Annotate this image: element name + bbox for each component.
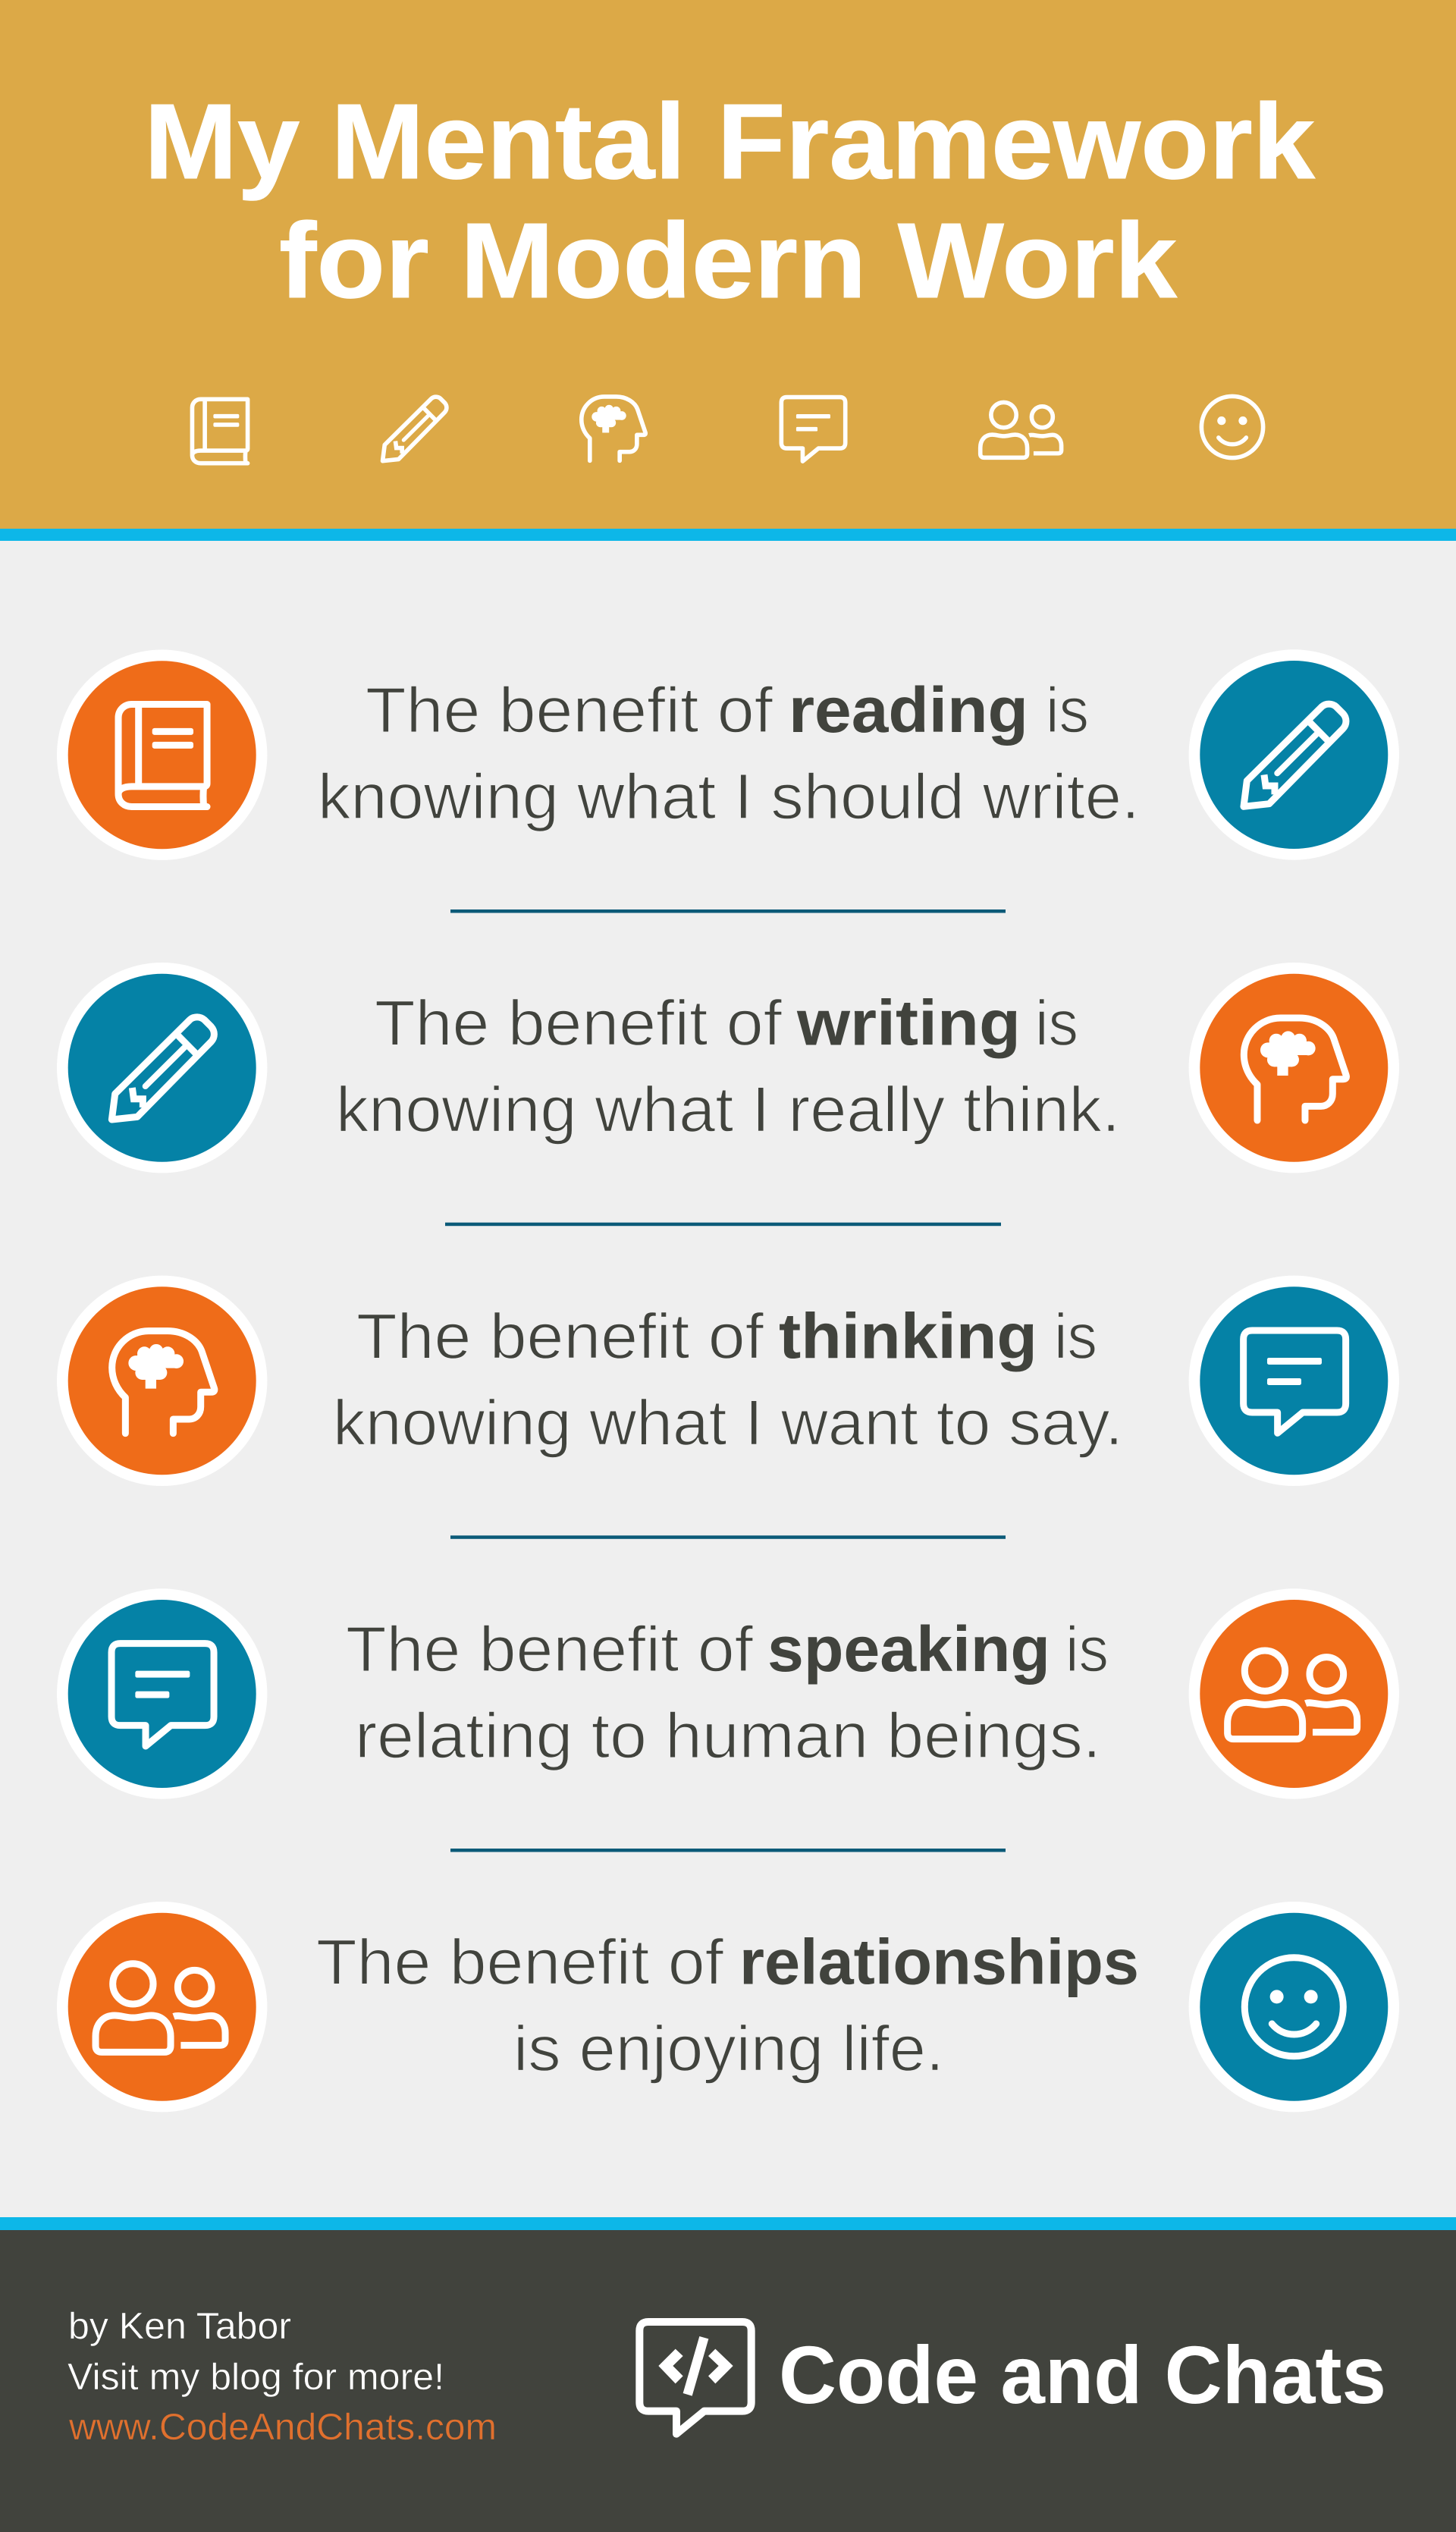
text: benefit of thinking <box>333 1300 1123 1458</box>
text: benefit of writing: knowing what I really think. <box>336 1074 1120 1145</box>
title <box>144 81 1316 320</box>
icon: head badge <box>57 1276 267 1486</box>
icon: people <box>981 402 1062 457</box>
icon: speech bubble <box>781 397 846 461</box>
panel: row relationships <box>57 1902 1399 2112</box>
footer credits <box>67 2306 497 2448</box>
text: benefit of reading: reading <box>789 674 1028 746</box>
panel: row speaking <box>57 1588 1399 1799</box>
icon: smile badge <box>1189 1902 1399 2112</box>
text: benefit of speaking: is <box>1065 1613 1109 1685</box>
panel: main background <box>0 541 1456 2217</box>
text: benefit of speaking: relating to human beings. <box>355 1700 1101 1771</box>
footer credits: Visit my blog for more! <box>67 2357 444 2398</box>
panel: row reading <box>57 649 1399 860</box>
icon: people badge <box>57 1902 267 2112</box>
text: benefit of reading <box>318 674 1140 832</box>
panel: header <box>0 0 1456 541</box>
text: benefit of thinking: thinking <box>779 1300 1037 1371</box>
text: benefit of relationships: relationships <box>739 1927 1139 1998</box>
text: benefit of speaking: speaking <box>767 1613 1050 1685</box>
icon: smile <box>1201 396 1263 458</box>
icon: pencil badge <box>1189 649 1399 860</box>
text: benefit of reading: knowing what I should write. <box>318 761 1140 832</box>
text: benefit of thinking: knowing what I want to say. <box>333 1387 1123 1458</box>
title: for Modern Work <box>279 200 1178 320</box>
icon: speech bubble badge <box>1189 1276 1399 1486</box>
text: benefit of reading: is <box>1046 674 1089 746</box>
logo: code bubble <box>639 2322 752 2434</box>
panel: row thinking <box>57 1276 1399 1486</box>
icon: head with brain <box>582 397 645 460</box>
text: benefit of relationships: The benefit of <box>316 1927 724 1998</box>
text: benefit of reading: The benefit of <box>366 674 774 746</box>
logo wordmark: Code and Chats <box>779 2329 1386 2420</box>
text: benefit of writing: The benefit of <box>375 988 783 1059</box>
text: benefit of relationships <box>316 1927 1139 2084</box>
text: benefit of relationships: is enjoying life. <box>513 2013 944 2084</box>
text: benefit of speaking: The benefit of <box>346 1613 754 1685</box>
title: My Mental Framework <box>144 81 1316 201</box>
footer credits: www.CodeAndChats.com <box>68 2407 497 2448</box>
panel: footer <box>0 2217 1456 2532</box>
text: benefit of thinking: is <box>1054 1300 1097 1371</box>
icon: head badge <box>1189 963 1399 1173</box>
header icon row <box>192 396 1263 463</box>
panel: row writing <box>57 963 1399 1173</box>
text: benefit of writing <box>336 988 1120 1145</box>
icon: pencil <box>383 397 447 461</box>
text: benefit of thinking: The benefit of <box>356 1300 764 1371</box>
icon: speech bubble badge <box>57 1588 267 1799</box>
icon: people badge <box>1189 1588 1399 1799</box>
text: benefit of writing: is <box>1035 988 1078 1059</box>
icon: book <box>192 399 248 463</box>
footer credits: by Ken Tabor <box>68 2306 291 2347</box>
icon: pencil badge <box>57 963 267 1173</box>
icon: book badge <box>57 649 267 860</box>
text: benefit of writing: writing <box>796 988 1021 1059</box>
text: benefit of speaking <box>346 1613 1109 1771</box>
